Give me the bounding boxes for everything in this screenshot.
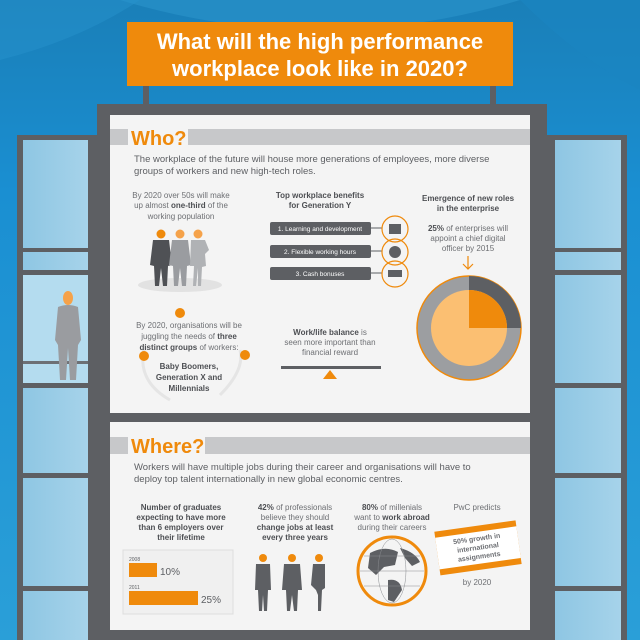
text: 80%: during their careers [358, 523, 426, 532]
bar chart: 2008 [129, 557, 140, 563]
heading: where [110, 436, 530, 458]
text: graduates: than 6 employers over [139, 523, 223, 532]
text: work/life balance [281, 328, 381, 379]
icon: globe [358, 537, 426, 605]
benefits list [270, 216, 408, 287]
text: graduates [136, 503, 226, 542]
text: by 2020: by 2020 [463, 578, 492, 587]
benefits heading [276, 191, 365, 210]
right heading: new roles: 25% of enterprises will [428, 224, 508, 233]
text: 42%: change jobs at least [257, 523, 334, 532]
callout: 50% growth: international [457, 542, 499, 555]
intro text: The workplace of the future will house more generations of employees, more diverse [134, 154, 489, 165]
heading: where: Where? [131, 436, 204, 458]
intro text: Workers will have multiple jobs during their career and organisations will have to [134, 462, 471, 473]
text: 42% [257, 503, 334, 542]
callout: 50% growth: assignments [458, 551, 501, 564]
bar chart: 2011 [129, 585, 140, 591]
intro text [134, 154, 489, 177]
right side building [543, 135, 627, 640]
title banner: workplace look like in 2020? [171, 56, 468, 81]
text: juggling groups: By 2020, organisations will be [136, 321, 242, 330]
text: graduates: their lifetime [157, 533, 205, 542]
panel: who [110, 115, 530, 413]
text: over 50s: up almost one-third of the [134, 201, 228, 210]
text: graduates: expecting to have more [136, 513, 226, 522]
text: over 50s: By 2020 over 50s will make [132, 191, 230, 200]
text: juggling groups: distinct groups of workers: [139, 343, 239, 352]
bar chart: 10% [160, 567, 180, 578]
benefits heading: for Generation Y [289, 201, 352, 210]
arrow [463, 256, 473, 269]
icon: three professionals [255, 554, 325, 611]
callout: 50% growth: 50% growth in [453, 533, 501, 546]
intro text: groups of workers and new high-tech roles. [134, 166, 316, 177]
text: PwC predicts: PwC predicts [453, 503, 501, 512]
left side building [17, 135, 97, 640]
title banner [127, 22, 513, 86]
text: juggling groups: Generation X and [156, 373, 222, 382]
title banner: What will the high performance [157, 29, 483, 54]
text: 80%: 80% of millenials [362, 503, 422, 512]
text: over 50s: working population [147, 212, 214, 221]
bar chart [123, 550, 233, 614]
benefits list: 1. Learning and development [278, 226, 362, 233]
text: work/life balance: financial reward [302, 348, 358, 357]
callout: 50% growth [434, 520, 522, 575]
right heading: new roles [422, 194, 515, 253]
text: juggling groups: juggling the needs of three [140, 332, 237, 341]
text: 80% [353, 503, 430, 532]
text: work/life balance: seen more important than [284, 338, 376, 347]
icon: three workers [138, 230, 222, 292]
benefits heading: Top workplace benefits [276, 191, 365, 200]
panel: where [110, 422, 530, 630]
right heading: new roles: Emergence of new roles [422, 194, 515, 203]
benefits list: 3. Cash bonuses [296, 271, 345, 278]
intro text: deploy top talent internationally in new global economic centres. [134, 474, 403, 485]
text: juggling groups: Millennials [169, 384, 210, 393]
benefits list: 2. Flexible working hours [284, 249, 357, 256]
pie chart [417, 276, 521, 380]
right heading: new roles: officer by 2015 [442, 244, 495, 253]
text: juggling groups: Baby Boomers, [160, 362, 218, 371]
main building [97, 86, 547, 640]
text: 42%: believe they should [261, 513, 329, 522]
right heading: new roles: appoint a chief digital [430, 234, 506, 243]
text: 42%: every three years [262, 533, 328, 542]
heading: who [110, 128, 530, 150]
bar chart: 25% [201, 595, 221, 606]
text: juggling groups [136, 308, 250, 400]
text: over 50s [132, 191, 230, 221]
heading: who: Who? [131, 128, 187, 150]
text: work/life balance: Work/life balance is [293, 328, 367, 337]
text: 42%: 42% of professionals [258, 503, 332, 512]
right heading: new roles: in the enterprise [437, 204, 500, 213]
text: graduates: Number of graduates [141, 503, 222, 512]
intro text [134, 462, 471, 485]
icon: man in window [55, 291, 81, 380]
text: 80%: want to work abroad [353, 513, 430, 522]
